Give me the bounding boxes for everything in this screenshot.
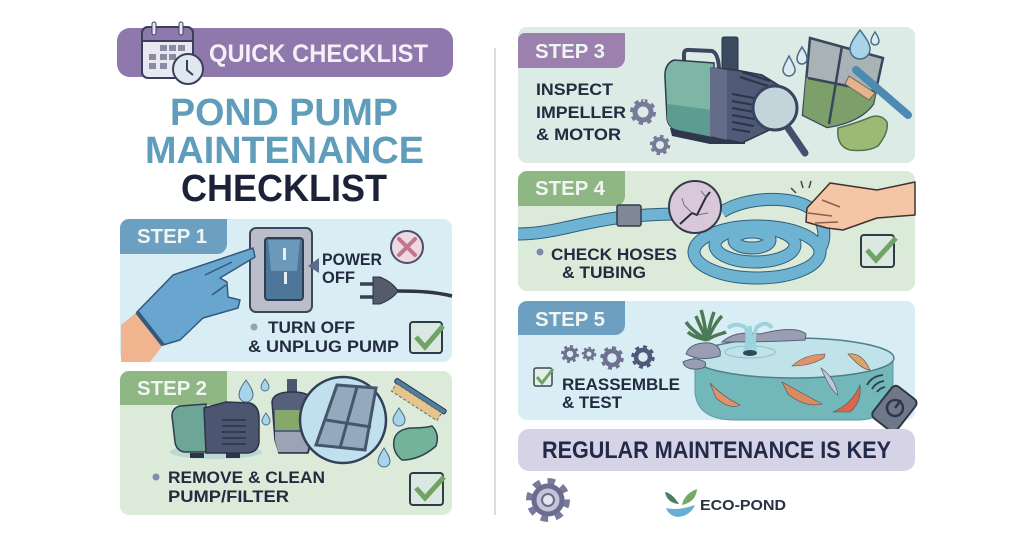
icon: checkbox [861, 235, 896, 267]
icon: pump with magnifier [665, 37, 805, 153]
pump feet [670, 128, 745, 144]
icon: plug and cord [360, 277, 452, 304]
icon: hose coupling [617, 205, 641, 226]
power off label [322, 250, 382, 287]
logo mark [665, 489, 697, 517]
panel: step 4 [518, 171, 915, 291]
step 4 tab [518, 171, 625, 206]
icon: brush [389, 378, 447, 422]
quick checklist banner [117, 22, 453, 84]
step 1 text [248, 318, 399, 356]
step 2 text: REMOVE & CLEAN [168, 468, 325, 487]
reeds [686, 310, 726, 340]
magnifier [788, 128, 805, 153]
panel: step 3 [518, 27, 915, 163]
step 2 tab: STEP 2 [137, 378, 207, 400]
pump body [665, 60, 714, 138]
icon: hand [791, 181, 915, 230]
pump outlet [722, 37, 738, 73]
pond surface [694, 338, 894, 378]
panel: step 1 [120, 219, 452, 362]
icon: water drops [783, 30, 879, 76]
step 3 tab [518, 33, 625, 68]
icon: red cross [391, 231, 423, 263]
step 3 text: & MOTOR [536, 125, 621, 144]
banner label: QUICK CHECKLIST [209, 40, 428, 68]
panel: step 5 [518, 301, 919, 434]
step 5 text [562, 375, 680, 412]
icon: water drops [239, 379, 405, 467]
icon: calendar with clock [142, 22, 203, 84]
icon: large gear [529, 481, 567, 519]
icon: gears row [562, 346, 653, 368]
regular maintenance banner [518, 429, 915, 471]
step 1 tab: STEP 1 [137, 226, 207, 248]
icon: koi pond [683, 310, 894, 420]
icon: remote control [867, 375, 919, 434]
step 1 tab [120, 219, 227, 254]
icon: checkbox [410, 322, 443, 353]
eco-pond logo [665, 489, 786, 517]
icon: crack magnifier [669, 181, 721, 233]
step 4 text: CHECK HOSES [551, 245, 677, 264]
step 5 text: & TEST [562, 393, 623, 412]
icon: filter canister [272, 379, 312, 453]
step 4 text [536, 245, 677, 282]
step 3 text: IMPELLER [536, 103, 626, 122]
rocks [683, 330, 806, 369]
title: CHECKLIST [181, 168, 387, 210]
pump handle [684, 50, 719, 68]
icon: checkbox [410, 473, 444, 505]
step 3 text [536, 80, 626, 144]
power off label: OFF [322, 268, 355, 287]
step 5 tab: STEP 5 [535, 309, 605, 331]
icon: submersible pump [170, 402, 262, 459]
koi fish [710, 354, 870, 412]
icon: gloved hand pressing switch [121, 248, 255, 362]
step 5 tab [518, 301, 625, 335]
icon: checkbox [534, 368, 553, 386]
arrow to power off [308, 258, 319, 273]
step 4 tab: STEP 4 [535, 178, 606, 200]
step 2 tab [120, 371, 227, 405]
step 3 tab: STEP 3 [535, 41, 605, 63]
step 1 text: & UNPLUG PUMP [248, 337, 399, 356]
step 2 text [152, 468, 325, 506]
panel: step 2 [120, 371, 452, 515]
step 4 text: & TUBING [562, 263, 646, 282]
icon: sponge [394, 426, 437, 460]
regular maintenance banner: REGULAR MAINTENANCE IS KEY [542, 437, 891, 464]
title: POND PUMP [170, 92, 398, 134]
icon: coiled hose [518, 199, 824, 278]
pond body [695, 362, 893, 420]
icon: filter frame [803, 38, 883, 127]
logo wordmark: ECO-POND [700, 497, 786, 514]
icon: gear [632, 101, 654, 123]
step 5 text: REASSEMBLE [562, 375, 680, 394]
power off label: POWER [322, 250, 382, 269]
title: MAINTENANCE [145, 130, 424, 172]
step 3 text: INSPECT [536, 80, 614, 99]
icon: wall switch [250, 228, 312, 312]
icon: sponge [838, 116, 887, 150]
title [145, 92, 424, 210]
icon: filter magnified [300, 377, 386, 463]
icon: brush [845, 70, 908, 115]
fountain [728, 324, 772, 352]
step 1 text: TURN OFF [268, 318, 355, 337]
icon: gear small [652, 136, 668, 154]
step 2 text: PUMP/FILTER [168, 487, 289, 506]
